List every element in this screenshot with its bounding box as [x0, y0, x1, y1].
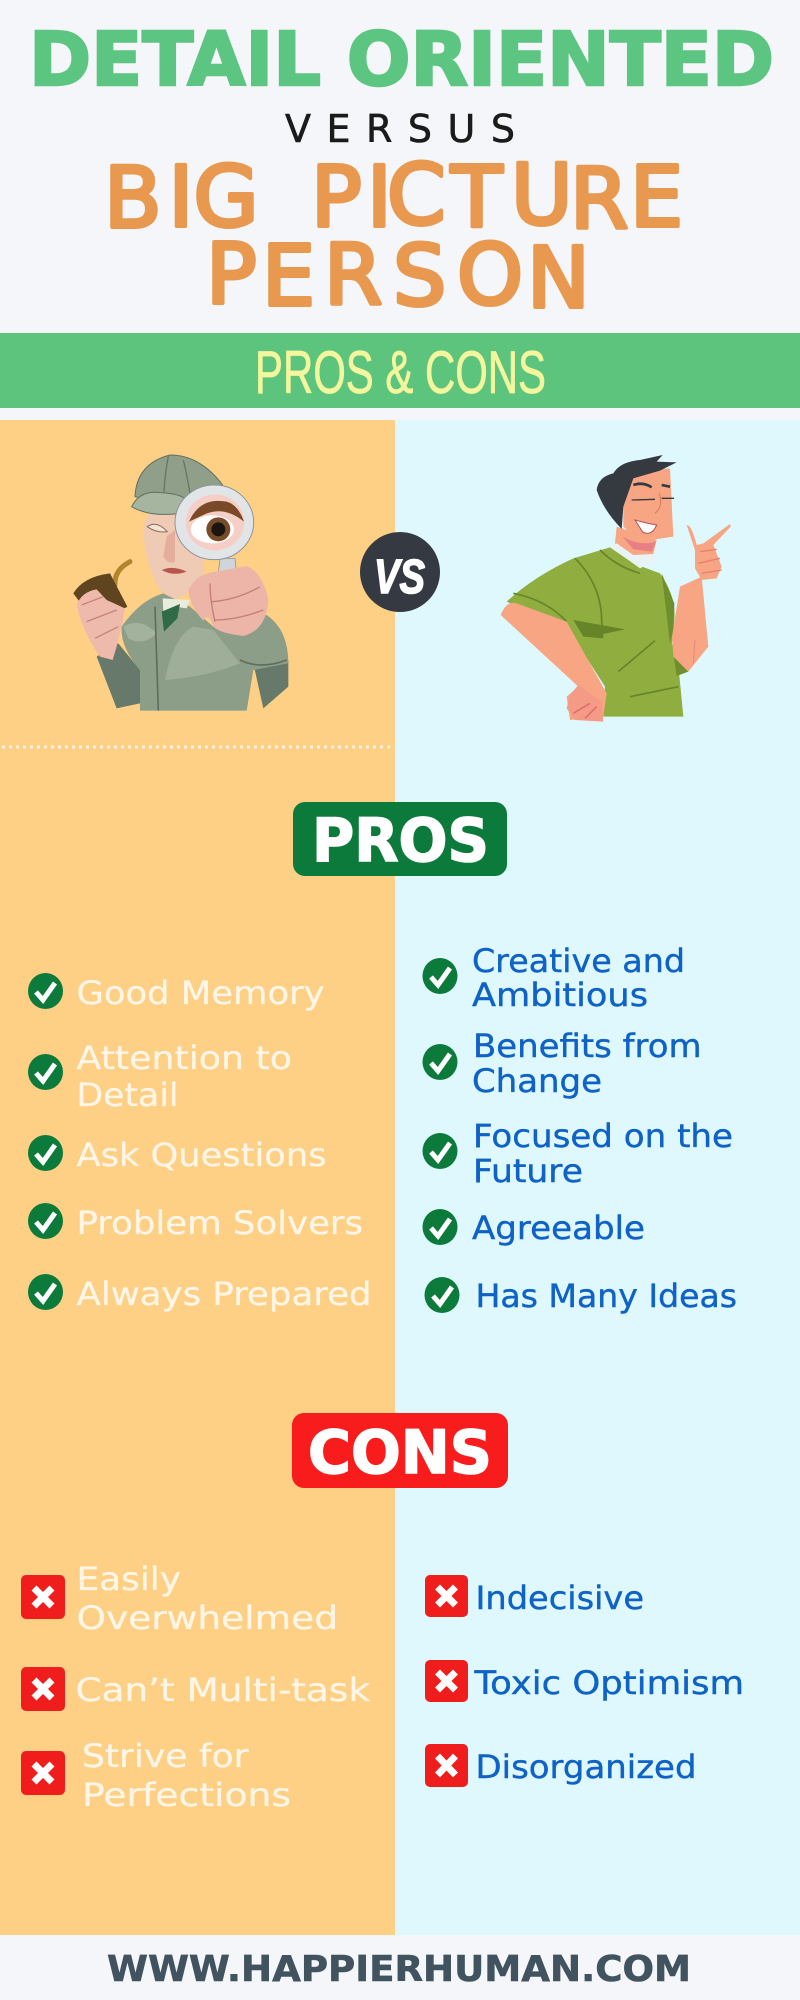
con: disorganized: Disorganized — [476, 1748, 696, 1786]
list: big picture pros — [422, 942, 737, 1315]
title: detail oriented: DETAIL ORIENTED — [29, 17, 774, 103]
con: cannot multi-task: Can’t Multi-task — [76, 1671, 371, 1709]
pro: creative and ambitious — [422, 942, 685, 1014]
pro: creative and ambitious: Creative and — [472, 942, 685, 980]
pro: agreeable: Agreeable — [472, 1209, 645, 1247]
banner: pros and cons: PROS & CONS — [255, 339, 546, 406]
pro: problem solvers: Problem Solvers — [76, 1204, 363, 1242]
title: big picture: PICTURE — [311, 146, 683, 248]
panel: detail oriented column — [0, 420, 395, 1935]
badge: vs: VS — [374, 551, 425, 604]
dotted divider under characters — [2, 746, 393, 748]
title: big picture — [104, 146, 683, 248]
pro: attention to detail: Attention to — [76, 1039, 292, 1077]
con: strive for perfections — [21, 1737, 291, 1814]
illustration: smiling man pointing — [501, 455, 731, 722]
pro: attention to detail: Detail — [76, 1076, 178, 1114]
con: indecisive — [425, 1575, 644, 1617]
pro: focused on the future: Focused on the — [473, 1117, 733, 1155]
panel: big picture column — [395, 420, 800, 1935]
footer: website url: WWW.HAPPIERHUMAN.COM — [107, 1949, 691, 1990]
pro: benefits from change — [422, 1027, 702, 1100]
badge: vs — [360, 532, 440, 612]
pro: ask questions: Ask Questions — [76, 1136, 326, 1174]
pro: has many ideas: Has Many Ideas — [476, 1277, 737, 1315]
con: toxic optimism — [425, 1660, 744, 1702]
list: big picture cons — [425, 1575, 744, 1787]
title: person: PERSON — [206, 225, 590, 327]
pro: attention to detail — [28, 1039, 292, 1114]
con: disorganized — [425, 1744, 696, 1787]
pro: focused on the future — [422, 1117, 733, 1190]
banner: pros and cons — [0, 333, 800, 408]
pro: always prepared: Always Prepared — [76, 1275, 372, 1313]
con: easily overwhelmed: Overwhelmed — [76, 1599, 338, 1637]
pro: good memory: Good Memory — [76, 974, 324, 1012]
title: big picture: BIG — [104, 148, 259, 247]
badge: cons: CONS — [308, 1418, 492, 1488]
con: cannot multi-task — [21, 1667, 371, 1711]
con: toxic optimism: Toxic Optimism — [473, 1664, 744, 1702]
con: strive for perfections: Perfections — [82, 1776, 291, 1814]
con: strive for perfections: Strive for — [82, 1737, 249, 1775]
pro: benefits from change: Benefits from — [473, 1027, 702, 1065]
con: indecisive: Indecisive — [476, 1579, 644, 1617]
illustration: detective with magnifying glass — [73, 455, 288, 711]
list: detail oriented pros — [28, 973, 372, 1313]
badge: pros: PROS — [312, 806, 489, 876]
subtitle: versus: VERSUS — [285, 107, 515, 151]
con: easily overwhelmed — [21, 1560, 338, 1637]
pro: benefits from change: Change — [472, 1062, 602, 1100]
list: detail oriented cons — [21, 1560, 371, 1814]
pro: focused on the future: Future — [473, 1152, 583, 1190]
con: easily overwhelmed: Easily — [76, 1560, 181, 1598]
pro: creative and ambitious: Ambitious — [472, 976, 648, 1014]
